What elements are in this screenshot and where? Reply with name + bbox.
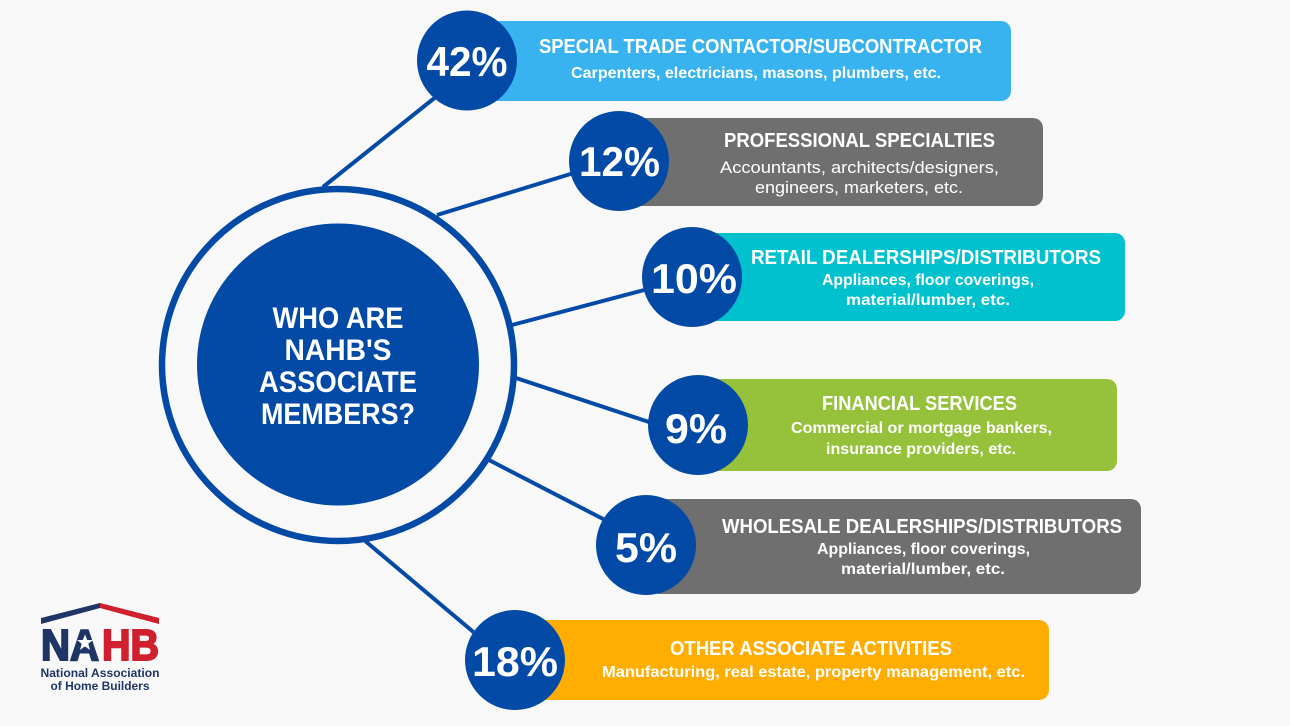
logo: NAHB: HB bbox=[102, 621, 159, 670]
segment: special trade contractor bbox=[417, 10, 1011, 110]
bar bbox=[630, 118, 1043, 206]
heading: WHOLESALE DEALERSHIPS/DISTRIBUTORS bbox=[722, 516, 1122, 538]
hub title: MEMBERS? bbox=[261, 398, 415, 431]
percent badge bbox=[569, 111, 669, 211]
logo: NAHB bbox=[40, 603, 160, 693]
percent value: 12% bbox=[579, 138, 660, 185]
heading: FINANCIAL SERVICES bbox=[822, 393, 1017, 415]
percent value: 42% bbox=[426, 38, 508, 85]
segment: professional specialties bbox=[569, 111, 1043, 211]
description: Manufacturing, real estate, property management, etc. bbox=[602, 664, 1025, 681]
outer ring bbox=[162, 189, 514, 541]
logo letters: NA bbox=[41, 621, 99, 670]
hub title: ASSOCIATE bbox=[259, 366, 417, 399]
segment: retail dealerships bbox=[642, 227, 1125, 327]
logo roof bbox=[41, 603, 100, 624]
bar bbox=[530, 620, 1049, 700]
percent value: 10% bbox=[651, 255, 737, 302]
heading: OTHER ASSOCIATE ACTIVITIES bbox=[670, 638, 952, 660]
percent value: 18% bbox=[472, 638, 558, 685]
bar bbox=[480, 21, 1011, 101]
percent badge bbox=[642, 227, 742, 327]
description: engineers, marketers, etc. bbox=[755, 178, 963, 197]
heading: RETAIL DEALERSHIPS/DISTRIBUTORS bbox=[751, 247, 1101, 269]
bar bbox=[650, 499, 1141, 594]
hub title: NAHB'S bbox=[284, 334, 392, 367]
percent badge bbox=[417, 10, 517, 110]
percent value: 5% bbox=[615, 524, 677, 571]
segment: wholesale dealerships bbox=[596, 495, 1141, 595]
description: insurance providers, etc. bbox=[826, 441, 1016, 458]
description: Appliances, floor coverings, bbox=[817, 541, 1030, 558]
percent value: 9% bbox=[665, 405, 727, 452]
logo caption: National Association bbox=[40, 668, 160, 680]
hub title bbox=[259, 302, 417, 431]
logo: NAHB: of Home Builders bbox=[50, 681, 150, 693]
description: material/lumber, etc. bbox=[846, 292, 1010, 309]
description bbox=[791, 420, 1052, 458]
description bbox=[720, 158, 999, 197]
percent badge bbox=[648, 375, 748, 475]
description bbox=[817, 541, 1030, 578]
bar bbox=[705, 379, 1117, 471]
description: Accountants, architects/designers, bbox=[720, 158, 999, 177]
inner circle bbox=[197, 224, 479, 506]
heading: PROFESSIONAL SPECIALTIES bbox=[724, 130, 995, 152]
logo star bbox=[77, 634, 93, 650]
central hub bbox=[162, 189, 514, 541]
hub title: WHO ARE bbox=[272, 302, 404, 335]
connector lines bbox=[323, 96, 652, 635]
description: Carpenters, electricians, masons, plumbers, etc. bbox=[571, 65, 941, 82]
segment: other activities bbox=[465, 610, 1049, 710]
heading: SPECIAL TRADE CONTACTOR/SUBCONTRACTOR bbox=[539, 36, 983, 58]
segment: financial services bbox=[648, 375, 1117, 475]
description: Commercial or mortgage bankers, bbox=[791, 420, 1052, 437]
bar bbox=[700, 233, 1125, 321]
description bbox=[822, 272, 1034, 309]
description: material/lumber, etc. bbox=[841, 561, 1005, 578]
percent badge bbox=[465, 610, 565, 710]
description: Appliances, floor coverings, bbox=[822, 272, 1034, 289]
percent badge bbox=[596, 495, 696, 595]
